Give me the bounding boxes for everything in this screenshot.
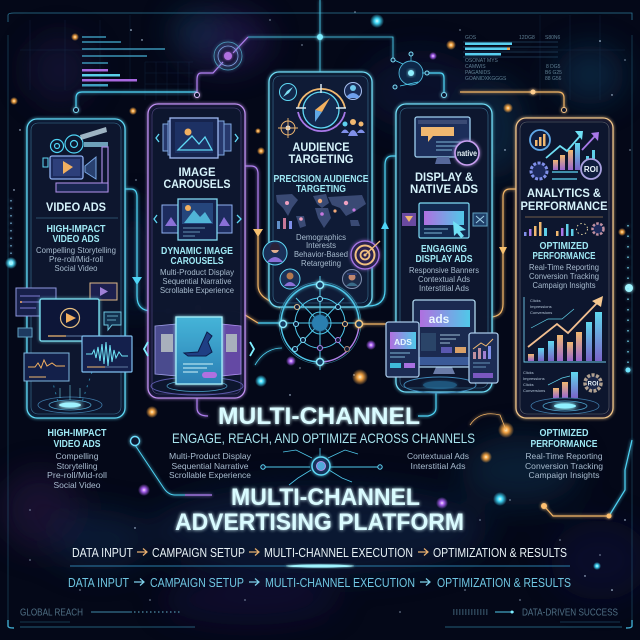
heading: audience targeting: TARGETING (288, 152, 354, 166)
text: optimized performance: Real-Time Reporting (529, 262, 599, 272)
text: precision audience targeting (274, 174, 369, 195)
icon: world map (276, 194, 366, 229)
icon: hub node (391, 52, 429, 89)
headline: multi-channel: MULTI-CHANNEL (218, 403, 420, 430)
icon: compass (296, 84, 346, 131)
lower text: video ads column (47, 428, 107, 490)
icon: mini chart row (524, 222, 604, 236)
text: precision audience targeting: PRECISION AUDIENCE (274, 174, 369, 185)
text: dynamic image carousels: Sequential Narrative (162, 276, 232, 286)
lower text: image carousels column: Sequential Narrative (172, 461, 249, 471)
chart: small chart with roi gear: ROI (588, 382, 599, 388)
icon: analytics cluster: ROI (584, 165, 598, 174)
subheading: engage reach optimize: ENGAGE, REACH, AND OPTIMIZE ACROSS CHANNELS (172, 430, 475, 446)
lower text: display ads column (407, 451, 469, 471)
divider glow (70, 564, 570, 568)
lower text: video ads column: Social Video (54, 480, 101, 490)
text: high-impact video ads (36, 224, 116, 273)
device: tablet: ADS (394, 337, 412, 347)
process flow: blue: CAMPAIGN SETUP (150, 575, 244, 590)
screen: main player (40, 299, 99, 341)
icon: central glowing node (261, 448, 382, 485)
heading: image carousels: CAROUSELS (164, 177, 230, 191)
icon: purple target node (214, 42, 242, 70)
text: engaging display ads: Interstitial Ads (419, 283, 469, 293)
text: targeting list: Behavior-Based (294, 249, 348, 259)
icon: user avatar (344, 82, 362, 100)
lower text: video ads column: Storytelling (56, 461, 98, 471)
panel: audience targeting (263, 72, 380, 307)
chart: small chart with roi gear (523, 370, 601, 398)
text: high-impact video ads: Social Video (54, 263, 98, 273)
screen: left list (16, 288, 56, 316)
chart: small chart with roi gear: Clicks (523, 370, 534, 375)
icon: image carousel middle (154, 199, 241, 240)
screen: pulse (24, 353, 69, 381)
data panel: top left list (82, 36, 165, 86)
text: optimized performance: Conversion Tracking (529, 271, 599, 281)
icon: central network hub (279, 276, 362, 370)
junction rings and nodes (9, 34, 633, 518)
title: multi-channel advertising platform: MULTI-CHANNEL (231, 484, 420, 511)
lower text: image carousels column (169, 451, 252, 480)
icon: crosshair (278, 118, 298, 138)
lower text: video ads column: Compelling (56, 451, 99, 461)
lower text: analytics column (525, 428, 603, 480)
heading: video ads: VIDEO ADS (46, 200, 106, 214)
chart: performance growth: Conversions (530, 310, 552, 315)
icon: carousel product cards (144, 317, 254, 395)
chart: performance growth: Impressions (530, 304, 552, 309)
icon: ad window with cursor (402, 203, 487, 238)
icon: video hologram screens (16, 283, 132, 413)
chart: performance growth: Clicks (530, 298, 541, 303)
text: engaging display ads (409, 244, 479, 293)
lower text: analytics column: Campaign Insights (528, 470, 600, 480)
heading: analytics and performance (520, 186, 608, 213)
lower text: display ads column: Contextuual Ads (407, 451, 469, 461)
text: targeting list: Demographics (296, 232, 346, 242)
icon: image carousel top (156, 118, 238, 158)
text: dynamic image carousels (160, 246, 235, 295)
text: targeting list (294, 232, 348, 268)
icon: avatar right (342, 270, 362, 288)
heading: audience targeting (288, 140, 354, 166)
lower text: video ads column: Pre-roll/Mid-roll (47, 470, 107, 480)
icon: people (341, 119, 365, 136)
icon: responsive devices (386, 300, 498, 393)
device: monitor: ads (429, 312, 450, 326)
data panel: top right table: CAMWIS (465, 64, 486, 70)
data panel: top right table: GOANIDXKGGGS (465, 76, 507, 82)
icon: target (351, 241, 380, 269)
icon: small compass (280, 84, 296, 100)
lower text: analytics column: Real-Time Reporting (526, 451, 603, 461)
text: precision audience targeting: TARGETING (296, 184, 346, 195)
data panel: top right table: OSONAT MYS (465, 58, 499, 64)
text: optimized performance (529, 241, 599, 290)
lower text: video ads column: VIDEO ADS (54, 439, 101, 450)
process flow: blue (68, 575, 571, 590)
text: optimized performance: OPTIMIZED (540, 241, 588, 252)
chart: small chart with roi gear: Impressions (523, 376, 545, 381)
process flow: white: OPTIMIZATION & RESULTS (433, 545, 567, 560)
text: targeting list: Interests (306, 240, 336, 250)
icon: analytics cluster (530, 130, 601, 179)
heading: analytics and performance: PERFORMANCE (520, 199, 608, 213)
text: engaging display ads: DISPLAY ADS (416, 254, 473, 265)
data panel: top right table: S80N6 (545, 35, 561, 41)
text: engaging display ads: Responsive Banners (409, 265, 479, 275)
text: dynamic image carousels: CAROUSELS (170, 256, 224, 267)
footer: data-driven success: DATA-DRIVEN SUCCESS (522, 608, 618, 618)
title: multi-channel advertising platform (175, 484, 464, 536)
text: high-impact video ads: Compelling Storytelling (36, 245, 116, 255)
process flow: white: MULTI-CHANNEL EXECUTION (264, 545, 413, 560)
text: high-impact video ads: Pre-roll/Mid-roll (49, 254, 103, 264)
device: phone (469, 333, 498, 383)
data panel: top right table: B6 G25 (545, 70, 562, 76)
screen: waveform (82, 336, 132, 372)
lower text: analytics column: Conversion Tracking (525, 461, 603, 471)
heading: audience targeting: AUDIENCE (292, 140, 350, 154)
text: engaging display ads: ENGAGING (421, 244, 467, 255)
process flow: blue: DATA INPUT (68, 575, 129, 590)
icon: avatar left (263, 241, 287, 265)
chart: small chart with roi gear: Conversions (523, 388, 545, 393)
icon: monitor with native badge (415, 117, 479, 165)
heading: display and native ads: NATIVE ADS (410, 182, 478, 196)
heading: analytics and performance: ANALYTICS & (527, 186, 601, 200)
footer: data-driven success (453, 608, 618, 618)
faint grid (20, 15, 625, 100)
icon: movie camera (43, 127, 108, 192)
text: dynamic image carousels: DYNAMIC IMAGE (161, 246, 233, 257)
lower text: image carousels column: Multi-Product Display (169, 451, 252, 461)
panel: analytics and performance (516, 118, 613, 418)
icon: hologram base (531, 398, 599, 414)
data panel: top right table: 12DG8 (519, 35, 535, 41)
text: high-impact video ads: HIGH-IMPACT (46, 224, 106, 235)
lower text: image carousels column: Scrollable Experience (169, 470, 251, 480)
process flow: blue: MULTI-CHANNEL EXECUTION (265, 575, 415, 590)
heading: image carousels: IMAGE (178, 165, 216, 179)
heading: display and native ads: DISPLAY & (415, 170, 473, 184)
lower text: analytics column: OPTIMIZED (540, 428, 588, 439)
process flow: blue: OPTIMIZATION & RESULTS (437, 575, 571, 590)
title: multi-channel advertising platform: ADVERTISING PLATFORM (175, 509, 464, 536)
icon: avatar lower (280, 269, 300, 289)
panel: image carousels (148, 104, 245, 398)
footer: global reach: GLOBAL REACH (20, 608, 83, 618)
arrowheads on connectors (132, 221, 507, 285)
text: targeting list: Retargeting (301, 258, 341, 268)
chart: performance growth (524, 296, 606, 362)
lower text: display ads column: Interstitial Ads (410, 461, 466, 471)
data panel: top right table (463, 35, 562, 82)
data panel: top right table: 8 DG5 (546, 64, 561, 70)
panel: video ads (27, 119, 125, 418)
data panel: top right table: PAGANIDS (465, 70, 491, 76)
screen: top right player (90, 283, 117, 300)
data panel: top right table: GOS (465, 35, 477, 41)
heading: display and native ads (410, 170, 478, 196)
text: engaging display ads: Contextual Ads (418, 274, 470, 284)
text: optimized performance: Campaign Insights (532, 280, 596, 290)
lower text: video ads column: HIGH-IMPACT (48, 428, 106, 439)
text: dynamic image carousels: Multi-Product Display (160, 267, 235, 277)
chart: small chart with roi gear: Clicks (523, 382, 534, 387)
data panel: top right table: 88 G56 (545, 76, 562, 82)
lower text: analytics column: PERFORMANCE (530, 439, 598, 450)
icon: chat bubble (104, 312, 121, 330)
panel: display and native ads (396, 104, 492, 392)
process flow: white: DATA INPUT (72, 545, 133, 560)
text: optimized performance: PERFORMANCE (532, 251, 596, 262)
connectors (76, 0, 632, 516)
process flow: white: CAMPAIGN SETUP (152, 545, 245, 560)
text: dynamic image carousels: Scrollable Experience (160, 285, 234, 295)
heading: image carousels (164, 165, 230, 191)
process flow: white (72, 545, 567, 560)
text: high-impact video ads: VIDEO ADS (52, 234, 100, 245)
icon: monitor with native badge: native (457, 149, 477, 158)
